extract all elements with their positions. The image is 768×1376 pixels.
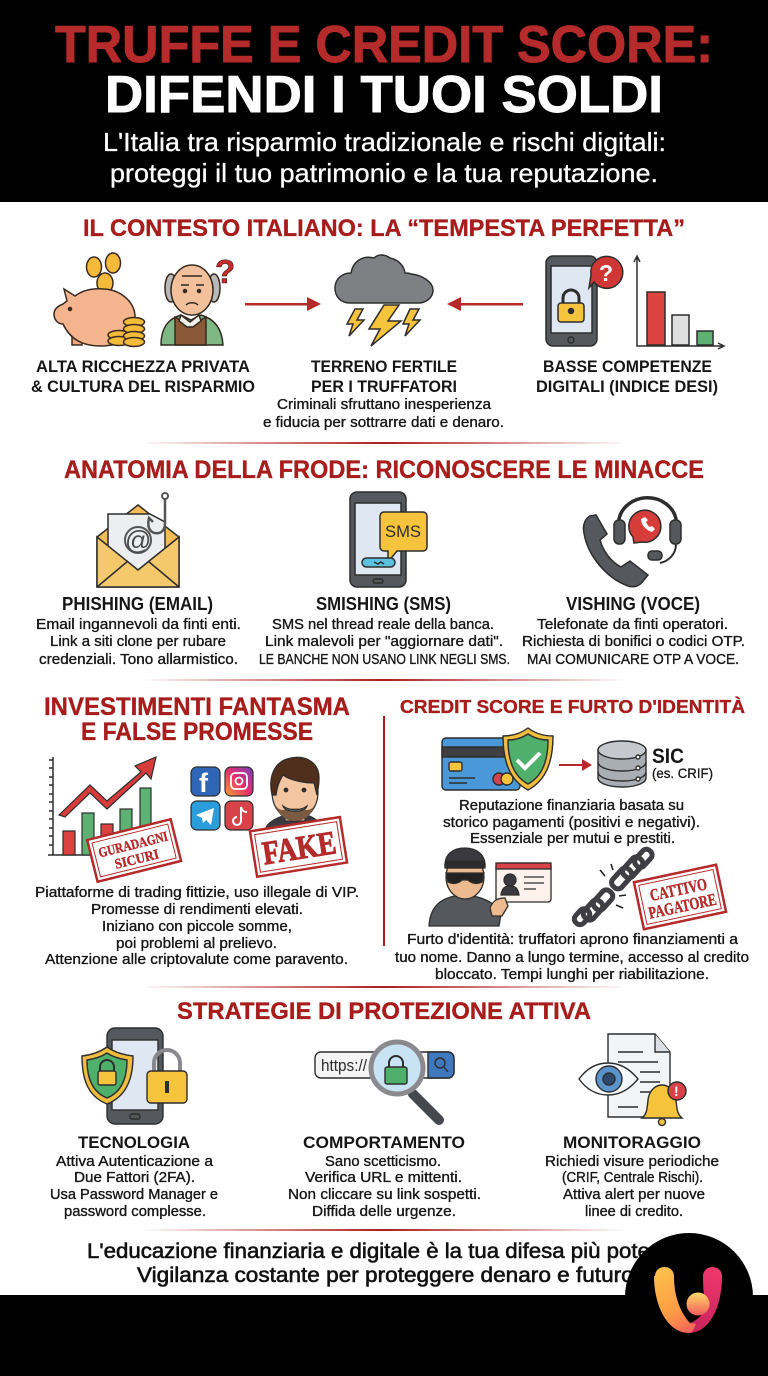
text: reputazione: storico pagamenti (positivi e negativi). [443, 815, 700, 831]
icon: phone with padlock and question bubble: ? [599, 260, 613, 286]
column: smishing: SMS nel thread reale della banca. [272, 617, 494, 633]
column: tecnologia: Attiva Autenticazione a [56, 1154, 214, 1170]
column: vishing: Telefonate da finti operatori. [537, 617, 728, 633]
text: furto d'identità: Furto d'identità: truffatori aprono finanziamenti a [407, 932, 739, 948]
column: vishing: MAI COMUNICARE OTP A VOCE. [527, 652, 739, 668]
label: SIC: (es. CRIF) [652, 766, 713, 781]
label: alta ricchezza: & CULTURA DEL RISPARMIO [31, 377, 255, 396]
icon: worried elderly man [161, 265, 223, 345]
subtitle: proteggi il tuo patrimonio e la tua reputazione. [110, 158, 658, 188]
icon: smishing phone with SMS bubble: SMS [385, 522, 421, 541]
icon: document, eye and bell [579, 1034, 686, 1126]
text: furto d'identità: tuo nome. Danno a lungo termine, accesso al credito [395, 950, 749, 966]
icon: phone with padlock and question bubble [546, 256, 623, 346]
column: smishing: LE BANCHE NON USANO LINK NEGLI SMS. [259, 652, 510, 668]
chart: rising bars and arrow [48, 757, 156, 855]
icon: smishing phone with SMS bubble [350, 492, 427, 587]
arrow: right to centre [447, 297, 523, 311]
closing message [87, 1240, 687, 1287]
heading: investimenti: INVESTIMENTI FANTASMA [44, 693, 350, 721]
column: comportamento: Verifica URL e mittenti. [305, 1170, 462, 1186]
column: monitoraggio: Attiva alert per nuove [563, 1187, 705, 1203]
heading: credit score: CREDIT SCORE E FURTO D'IDENTITÀ [400, 696, 745, 717]
arrow: left to centre [245, 297, 321, 311]
icon: phishing envelope with hook [97, 493, 179, 587]
icon: vishing phone with headset [583, 498, 681, 587]
column: phishing: credenziali. Tono allarmistico. [39, 652, 238, 668]
label: SIC [652, 745, 713, 781]
text: criminali [263, 397, 504, 431]
column: phishing: Email ingannevoli da finti enti. [36, 617, 241, 633]
column: tecnologia: Usa Password Manager e [50, 1187, 218, 1203]
panel: investimenti fantasma [35, 693, 359, 968]
stamp: fake: FAKE [260, 825, 339, 872]
panel: credit score e furto d'identità [395, 696, 749, 983]
heading: contesto: IL CONTESTO ITALIANO: LA “TEMPESTA PERFETTA” [83, 215, 685, 242]
column: tecnologia: TECNOLOGIA [78, 1133, 190, 1152]
panel: strategie di protezione [50, 998, 719, 1220]
panel: contesto italiano [31, 215, 724, 431]
column: smishing: Link malevoli per "aggiornare dati". [265, 634, 503, 650]
icon: database [598, 741, 646, 787]
heading: anatomia: ANATOMIA DELLA FRODE: RICONOSCERE LE MINACCE [64, 456, 704, 484]
column: phishing: Link a siti clone per rubare [50, 634, 226, 650]
subtitle [103, 127, 666, 188]
heading: investimenti [44, 693, 350, 746]
label: alta ricchezza [31, 357, 255, 396]
icon: broken chain [572, 847, 654, 927]
title line 1: TRUFFE E CREDIT SCORE: [55, 16, 713, 74]
bar chart: low digital skills [634, 256, 724, 349]
arrow: card to SIC [559, 759, 592, 771]
stamp: cattivo pagatore: PAGATORE [647, 890, 718, 923]
label: basse competenze: DIGITALI (INDICE DESI) [536, 377, 718, 396]
icon: URL bar with magnifier: https:// [321, 1056, 367, 1075]
column: vishing: Richiesta di bonifici o codici OTP. [522, 634, 745, 650]
text: investimenti body [35, 885, 359, 968]
closing message: L'educazione finanziaria e digitale è la tua difesa più potente. [87, 1240, 687, 1263]
text: investimenti body: Piattaforme di trading fittizie, uso illegale di VIP. [35, 885, 359, 901]
column: tecnologia: Due Fattori (2FA). [74, 1170, 195, 1186]
label: terreno fertile [311, 357, 457, 396]
column: phishing: PHISHING (EMAIL) [62, 594, 213, 614]
icon: storm cloud with lightning [335, 255, 433, 346]
icon: phone, shield and padlock [82, 1028, 187, 1124]
icon: credit card with shield [442, 728, 553, 790]
column: monitoraggio: linee di credito. [585, 1204, 683, 1220]
icon: red question mark: ? [215, 253, 235, 290]
label: terreno fertile: TERRENO FERTILE [311, 357, 457, 376]
text: investimenti body: Promesse di rendimenti elevati. [91, 902, 303, 918]
label: basse competenze [536, 357, 718, 396]
heading: investimenti: E FALSE PROMESSE [81, 718, 313, 746]
footer band [0, 1295, 768, 1376]
column: comportamento: Non cliccare su link sospetti. [288, 1187, 481, 1203]
text: criminali: e fiducia per sottrarre dati e denaro. [263, 415, 504, 431]
label: terreno fertile: PER I TRUFFATORI [311, 377, 457, 396]
subtitle: L'Italia tra risparmio tradizionale e rischi digitali: [103, 127, 666, 157]
logo right arm [685, 1267, 722, 1333]
text: criminali: Criminali sfruttano inesperienza [277, 397, 492, 413]
logo ball [686, 1292, 710, 1316]
column: comportamento [288, 1133, 481, 1220]
column: vishing [522, 594, 745, 668]
column: tecnologia [50, 1133, 218, 1220]
label: basse competenze: BASSE COMPETENZE [543, 357, 712, 376]
closing message: Vigilanza costante per proteggere denaro e futuro. [137, 1264, 640, 1287]
text: reputazione: Essenziale per mutui e prestiti. [470, 831, 675, 847]
icon: piggy bank with coins [54, 253, 144, 346]
stamp: cattivo pagatore [634, 865, 726, 929]
stamp: guadagni sicuri: SICURI [113, 847, 161, 873]
column: comportamento: Diffida delle urgenze. [312, 1204, 456, 1220]
column: comportamento: COMPORTAMENTO [303, 1133, 465, 1152]
icon: fake influencer portrait [265, 757, 323, 830]
column: tecnologia: password complesse. [64, 1204, 206, 1220]
text: reputazione [443, 798, 700, 847]
icons: social media: f [199, 768, 209, 798]
column: smishing [259, 594, 510, 668]
column: monitoraggio: MONITORAGGIO [563, 1133, 701, 1152]
panel: anatomia della frode [36, 456, 745, 668]
label: SIC: SIC [652, 745, 684, 768]
icon: URL bar with magnifier [315, 1042, 454, 1120]
icons: social media [191, 767, 253, 830]
label: alta ricchezza: ALTA RICCHEZZA PRIVATA [36, 357, 250, 376]
heading: strategie: STRATEGIE DI PROTEZIONE ATTIVA [177, 998, 591, 1025]
text: investimenti body: poi problemi al prelievo. [116, 936, 277, 952]
column: phishing [36, 594, 241, 668]
icon: phishing envelope with hook: @ [125, 525, 151, 555]
logo badge [625, 1233, 753, 1361]
header panel [0, 0, 768, 202]
column: smishing: SMISHING (SMS) [316, 594, 451, 614]
title line 2: DIFENDI I TUOI SOLDI [105, 66, 663, 124]
text: reputazione: Reputazione finanziaria basata su [459, 798, 684, 814]
column: monitoraggio: (CRIF, Centrale Rischi). [562, 1170, 703, 1186]
icon: document, eye and bell: ! [674, 1083, 679, 1099]
stamp: guadagni sicuri: GURADAGNI [97, 830, 170, 861]
stamp: guadagni sicuri [87, 819, 181, 882]
column: vishing: VISHING (VOCE) [566, 594, 700, 614]
logo left arm [654, 1267, 696, 1333]
stamp: cattivo pagatore: CATTIVO [648, 874, 709, 905]
text: furto d'identità [395, 932, 749, 983]
text: investimenti body: Attenzione alle criptovalute come paravento. [45, 952, 348, 968]
icon: masked thief with ID card [429, 848, 551, 926]
column: comportamento: Sano scetticismo. [325, 1154, 441, 1170]
text: furto d'identità: bloccato. Tempi lunghi per riabilitazione. [435, 967, 709, 983]
column: monitoraggio: Richiedi visure periodiche [545, 1154, 719, 1170]
column: monitoraggio [545, 1133, 719, 1220]
text: investimenti body: Iniziano con piccole somme, [102, 919, 292, 935]
